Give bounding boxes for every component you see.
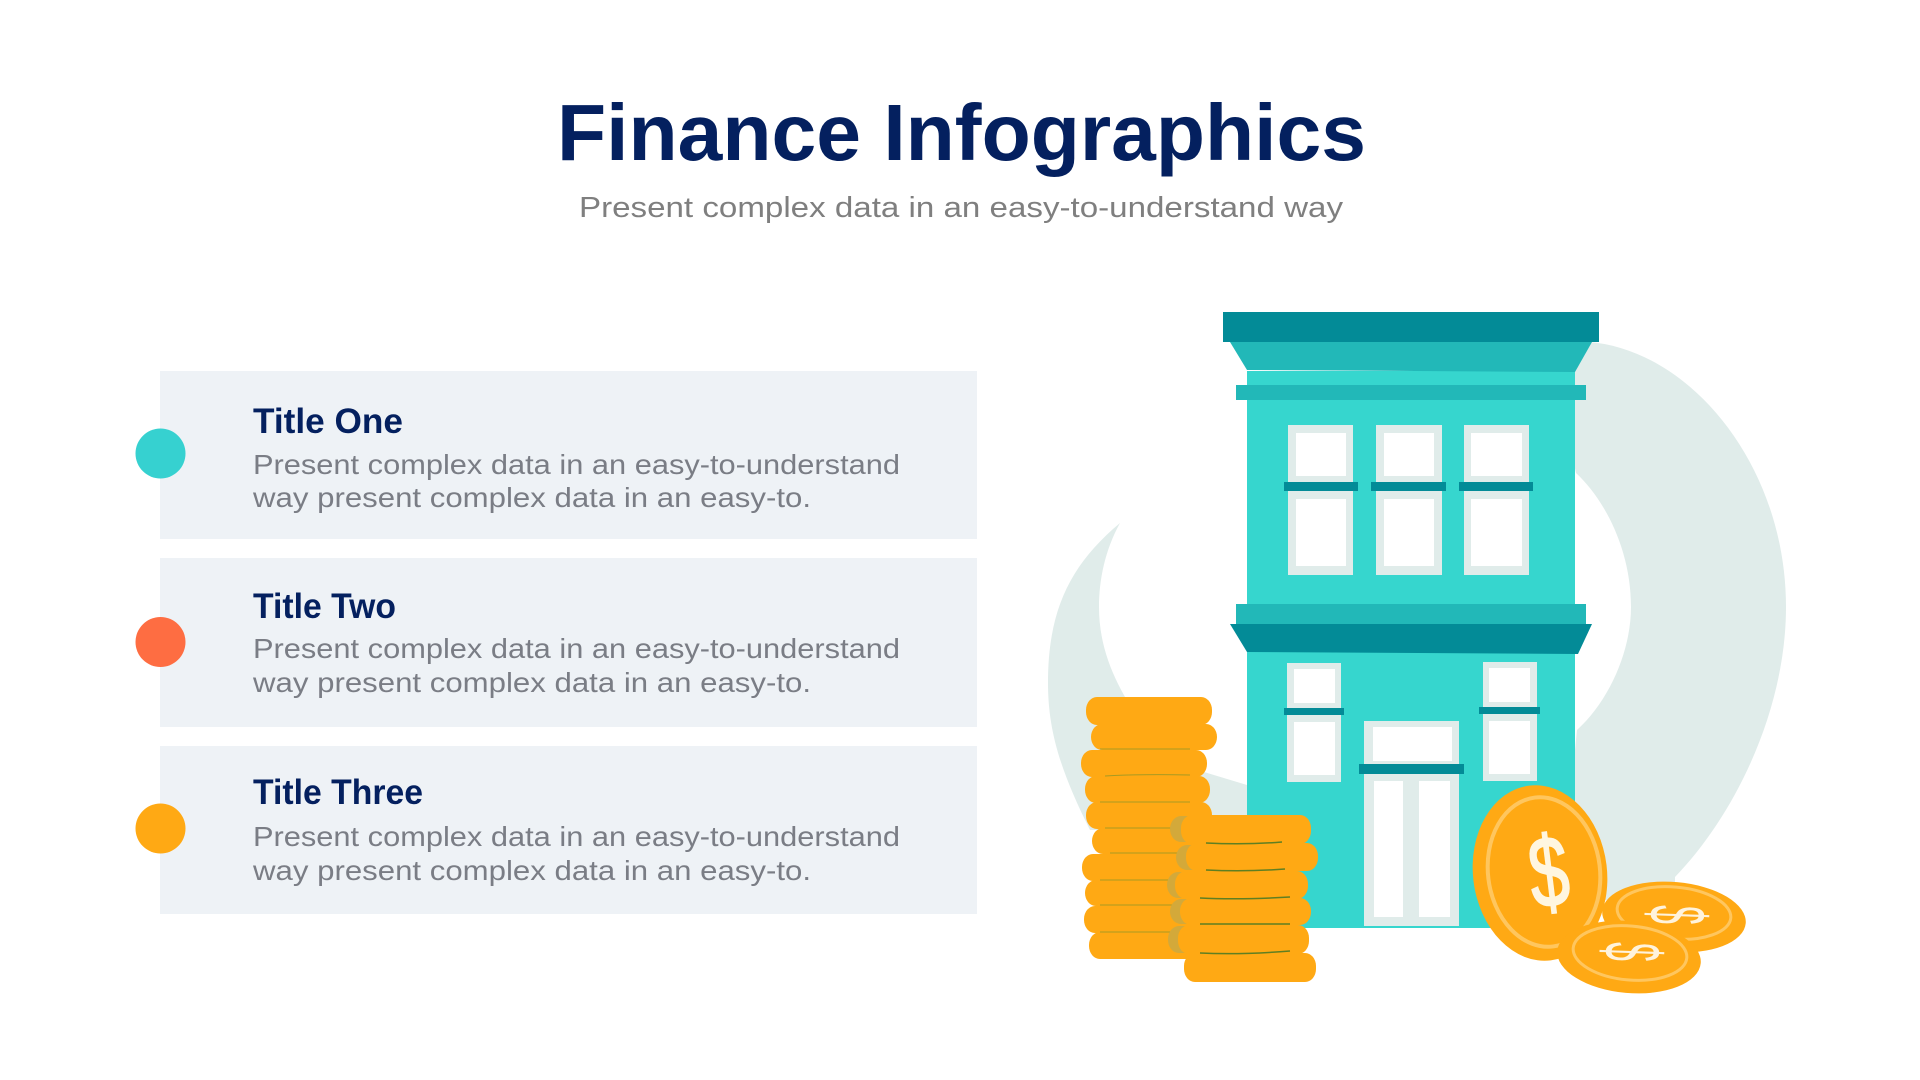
marker: orange dot (136, 617, 186, 667)
illustration: front small coin (1554, 915, 1704, 999)
panel: title two (136, 558, 977, 727)
door (1359, 721, 1464, 926)
heading: title three: Title Three (253, 773, 423, 812)
text block: title two description: way present complex data in an easy-to. (252, 667, 811, 698)
panel: title three (136, 746, 977, 914)
text block: title one description: Present complex data in an easy-to-understand (253, 449, 900, 480)
marker: teal dot (136, 428, 186, 478)
illustration: front small coin: $ (1586, 941, 1677, 963)
heading: title one: Title One (253, 402, 403, 441)
illustration: back small coin: $ (1631, 904, 1722, 926)
text block: title three description: way present complex data in an easy-to. (252, 855, 811, 886)
subtitle: Present complex data in an easy-to-understand way (579, 192, 1344, 224)
illustration: large dollar coin: $ (1523, 815, 1575, 930)
illustration: background swoosh (1048, 342, 1786, 900)
illustration: back small coin (1599, 876, 1749, 958)
panel: title one (136, 371, 977, 539)
title: Finance Infographics (557, 88, 1366, 177)
illustration: left coin stack (1081, 697, 1217, 959)
text block: title three description (252, 821, 900, 886)
text block: title one description: way present complex data in an easy-to. (252, 482, 811, 513)
text block: title two description (252, 633, 900, 698)
illustration: large dollar coin (1463, 777, 1617, 969)
upper windows (1284, 425, 1533, 575)
lower windows (1284, 662, 1540, 782)
marker: amber dot (136, 804, 186, 854)
heading: title two: Title Two (253, 587, 396, 626)
text block: title three description: Present complex data in an easy-to-understand (253, 821, 900, 852)
illustration: building (1223, 312, 1599, 928)
illustration: right coin stack (1167, 815, 1318, 982)
text block: title one description (252, 449, 900, 513)
text block: title two description: Present complex data in an easy-to-understand (253, 633, 900, 664)
